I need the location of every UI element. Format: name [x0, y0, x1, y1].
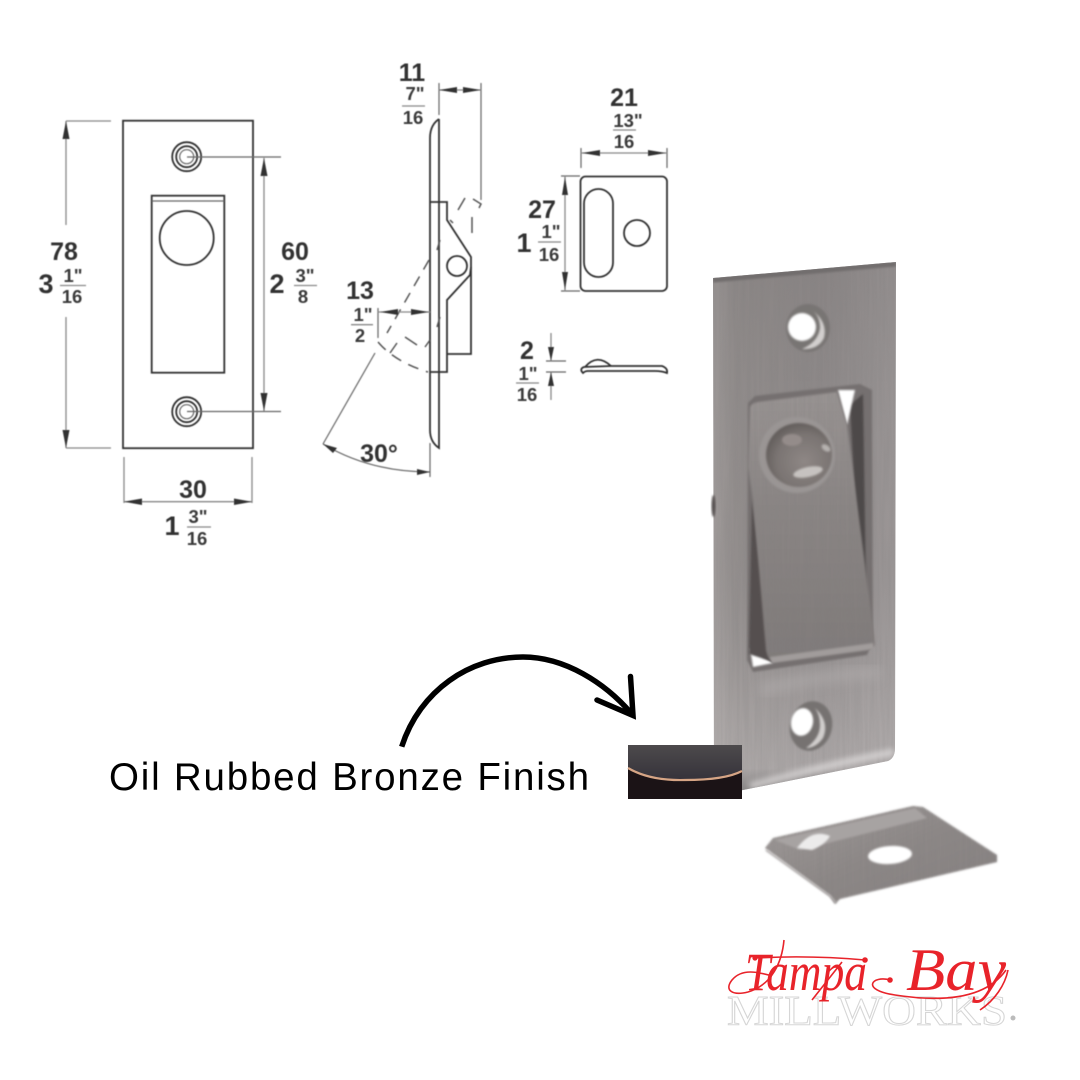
dimension: angle 30 degrees	[323, 353, 430, 477]
dimension: thickness 2: 2	[520, 337, 534, 365]
bottom screw hole	[172, 397, 201, 426]
dimension: thickness 2: 1"	[518, 363, 538, 384]
dashed open position of lever	[378, 198, 481, 372]
metal plate body	[713, 262, 897, 796]
lever rivet dome	[759, 417, 835, 493]
dark shadow wedge beside lever	[850, 394, 866, 590]
dimension: strike height 27	[516, 176, 580, 291]
dimension: screw spacing 60: 3"	[295, 265, 315, 286]
dimension: lever swing 13: 1"	[353, 304, 373, 325]
curved arrow pointing to finish swatch	[402, 657, 633, 747]
dimension: screw spacing 60	[187, 157, 317, 412]
dimension: screw spacing 60: 8	[298, 286, 308, 307]
dimension: height 78: 16	[62, 286, 82, 307]
logo script: Bay: Bay	[906, 937, 1006, 1003]
dimension: lever swing 13: 2	[355, 325, 365, 346]
dimension: strike height 27: 1"	[541, 221, 561, 242]
logo flourishes	[729, 940, 1008, 1010]
dimension: screw spacing 60: 60	[281, 238, 309, 266]
bottom screw hole with countersink	[784, 696, 838, 756]
dimension: depth 11	[399, 59, 481, 200]
dimension: width 30: 16	[187, 528, 207, 549]
dimension: depth 11: 11	[399, 59, 425, 87]
dimension: thickness 2	[516, 333, 566, 405]
strike plate edge profile	[581, 360, 667, 373]
product photo: latch plate with lever	[712, 262, 997, 904]
white gap at bottom of recess	[750, 648, 773, 667]
dimension: width 30: 3"	[188, 506, 208, 527]
dimension: height 78: 1"	[63, 265, 83, 286]
top screw hole with countersink	[786, 304, 830, 352]
dimension: height 78: 3	[38, 269, 54, 299]
logo: Tampa Bay Millworks	[727, 937, 1016, 1035]
dimension: strike height 27: 27	[528, 196, 556, 224]
dimension: angle 30 degrees: 30°	[360, 440, 398, 468]
dimension: depth 11: 16	[403, 107, 423, 128]
technical drawing: side view of latch	[323, 59, 481, 477]
logo script: Tampa: Tampa	[745, 942, 867, 1002]
dimension: width 30: 1	[164, 511, 180, 541]
logo wordmark: Millworks: MILLWORKS	[727, 989, 1007, 1035]
dimension: height 78	[38, 121, 111, 448]
strike plate top view	[580, 176, 667, 291]
lever recess	[747, 384, 873, 672]
finish swatch: oil rubbed bronze	[628, 745, 742, 799]
white gap at top of recess	[838, 390, 855, 425]
dimension: height 78: 78	[50, 238, 78, 266]
dimension: screw spacing 60: 2	[269, 269, 285, 299]
dimension: lever swing 13	[346, 277, 430, 346]
mounting nub at left edge	[712, 495, 716, 517]
dimension: depth 11: 7"	[405, 83, 425, 104]
lever window	[152, 196, 224, 373]
dimension: strike width 21: 13"	[613, 110, 643, 131]
top screw hole	[172, 142, 201, 171]
dimension: width 30: 30	[179, 476, 207, 504]
dimension: strike width 21	[581, 84, 667, 168]
dimension: strike height 27: 1	[516, 228, 532, 258]
label: finish name: Oil Rubbed Bronze Finish	[109, 756, 589, 799]
dimension: strike width 21: 21	[610, 84, 638, 112]
dimension: strike width 21: 16	[614, 131, 634, 152]
technical drawing: front view of latch plate	[38, 121, 317, 549]
plate outline	[123, 121, 253, 448]
logo registered mark	[1010, 1016, 1016, 1020]
lever	[748, 392, 876, 664]
side plate and lever profile	[430, 119, 471, 448]
strike plate photo	[765, 806, 997, 904]
dimension: lever swing 13: 13	[346, 277, 374, 305]
dimension: strike height 27: 16	[539, 244, 559, 265]
technical drawing: strike plate	[516, 84, 667, 405]
dimension: width 30	[124, 457, 252, 549]
dimension: thickness 2: 16	[517, 384, 537, 405]
